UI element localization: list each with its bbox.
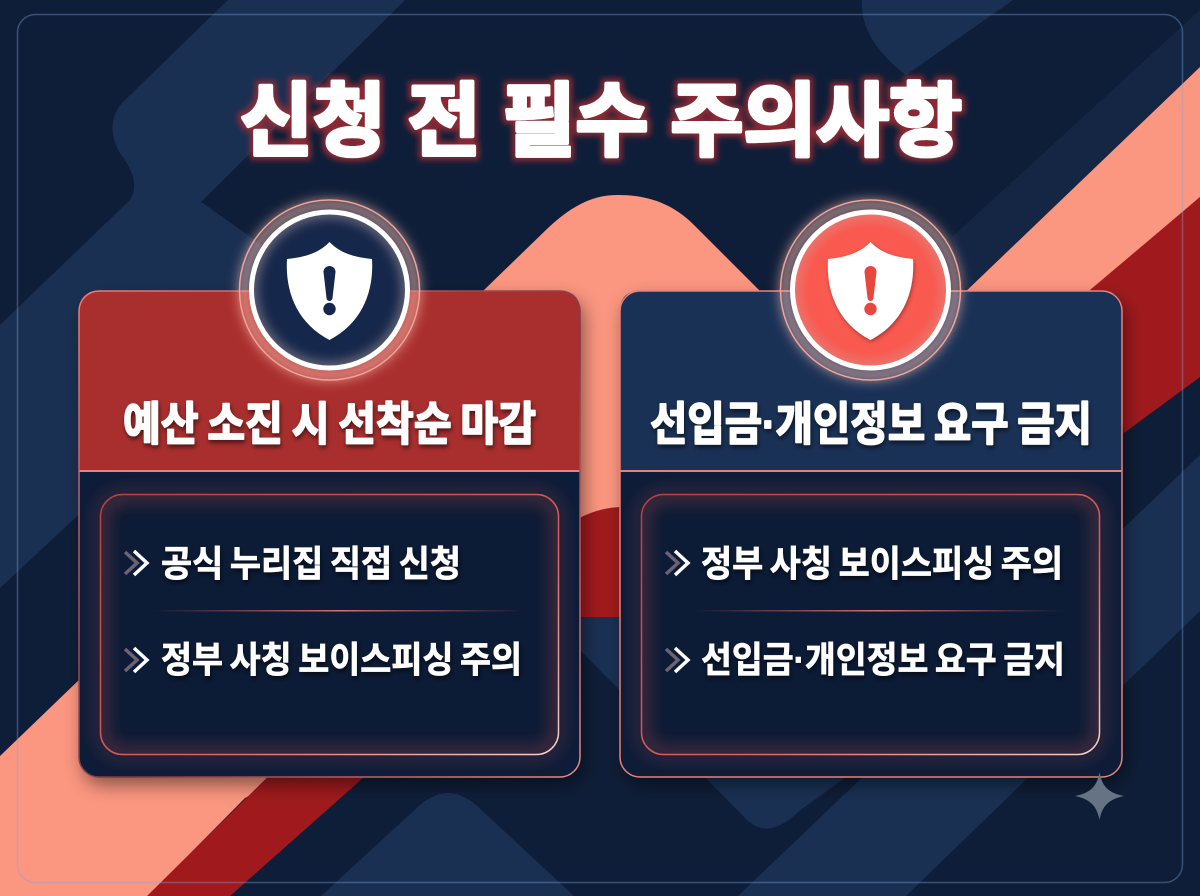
inner list panel: upfront payment card xyxy=(642,494,1100,754)
list item: voice phishing: 정부 사칭 보이스피싱 주의 xyxy=(701,543,1063,584)
heading: budget deadline: 예산 소진 시 선착순 마감 xyxy=(123,398,536,450)
title: 신청 전 필수 주의사항 xyxy=(240,77,962,166)
list item: voice phishing: 정부 사칭 보이스피싱 주의 xyxy=(161,639,522,680)
list item: official site: 공식 누리집 직접 신청 xyxy=(161,543,461,584)
icon: navy shield badge xyxy=(240,200,420,380)
icon: chevron bullet xyxy=(125,648,147,672)
card header: no upfront payment xyxy=(620,291,1122,471)
card header: budget deadline xyxy=(79,291,580,471)
panel: budget deadline card xyxy=(79,291,580,777)
panel: upfront payment card xyxy=(620,291,1122,777)
icon: chevron bullet xyxy=(666,551,688,575)
icon: red shield badge xyxy=(780,200,960,380)
icon: sparkle star xyxy=(1075,772,1124,820)
icon: chevron bullet xyxy=(125,551,147,575)
heading: no upfront payment: 선입금·개인정보 요구 금지 xyxy=(650,398,1092,450)
inner list panel: budget card xyxy=(100,494,558,754)
icon: chevron bullet xyxy=(666,648,688,672)
list item: no upfront payment: 선입금·개인정보 요구 금지 xyxy=(701,639,1065,680)
